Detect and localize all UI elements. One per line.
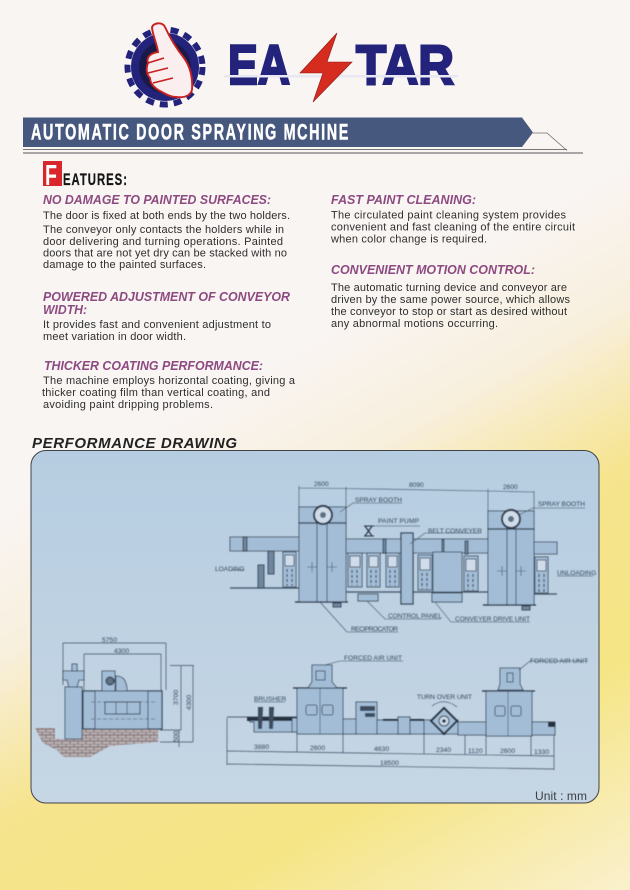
title banner xyxy=(23,118,583,153)
diagram: top plan view: CONTROL PANEL xyxy=(388,613,442,620)
diagram: side view: 3700 xyxy=(173,690,180,705)
diagram: top plan view: BELT CONVEYER xyxy=(428,528,482,535)
text block: convenient motion control xyxy=(331,263,570,330)
diagram: top plan view: UNLOADING xyxy=(557,570,596,577)
unit note: Unit : mm xyxy=(535,789,587,803)
diagram: top plan view: SPRAY BOOTH xyxy=(538,501,585,508)
text block: convenient motion control: driven by the same power source, which allows xyxy=(331,294,570,306)
diagram: side view: 4300 xyxy=(114,648,129,655)
text block: thicker coating: The machine employs horizontal coating, giving a xyxy=(43,375,296,387)
heading: features xyxy=(43,160,128,192)
logo: Eastar xyxy=(128,23,458,104)
diagram: front elevation: 2600 xyxy=(500,748,515,755)
diagram: front elevation: 2340 xyxy=(436,747,451,754)
text block: powered adjustment: meet variation in door width. xyxy=(43,331,186,343)
diagram: front elevation: FORCED AIR UNIT xyxy=(344,655,402,662)
text block: no damage: damage to the painted surfaces. xyxy=(43,259,206,271)
diagram: top plan view: RECIPROCATOR xyxy=(351,626,398,633)
diagram: front elevation: 1330 xyxy=(534,749,549,756)
text block: powered adjustment: POWERED ADJUSTMENT OF CONVEYOR xyxy=(43,290,290,304)
text block: convenient motion control: CONVENIENT MOTION CONTROL: xyxy=(331,263,535,277)
title text: AUTOMATIC DOOR SPRAYING MCHINE xyxy=(31,120,350,144)
heading: features: F xyxy=(45,160,57,192)
diagram: front elevation: 4630 xyxy=(374,746,389,753)
text block: fast paint cleaning: convenient and fast cleaning of the entire circuit xyxy=(331,222,575,234)
diagram: front elevation: BRUSHER xyxy=(254,696,286,703)
diagram: front elevation xyxy=(227,655,588,770)
text block: thicker coating: avoiding paint dripping problems. xyxy=(43,399,213,411)
diagram: top plan view: 2600 xyxy=(314,481,329,488)
text block: convenient motion control: The automatic turning device and conveyor are xyxy=(331,282,567,294)
diagram: top plan view: 8090 xyxy=(409,482,424,489)
text block: powered adjustment xyxy=(43,290,290,343)
text block: thicker coating: thicker coating film than vertical coating, and xyxy=(42,387,270,399)
text block: convenient motion control: the conveyor to stop or start as desired without xyxy=(331,306,567,318)
text block: no damage: door delivering and turning operations. Painted xyxy=(43,236,283,248)
text block: powered adjustment: WIDTH: xyxy=(43,303,87,317)
wordmark: EASTAR xyxy=(224,33,458,102)
text block: no damage xyxy=(43,193,290,271)
text block: no damage: The door is fixed at both ends by the two holders. xyxy=(43,210,290,222)
diagram: top plan view: LOADING xyxy=(215,566,245,573)
panel: performance drawing xyxy=(31,450,599,803)
text block: fast paint cleaning: when color change is required. xyxy=(330,234,487,246)
text block: thicker coating: THICKER COATING PERFORMANCE: xyxy=(44,359,263,373)
text block: fast paint cleaning xyxy=(330,193,575,246)
text block: powered adjustment: It provides fast and convenient adjustment to xyxy=(43,319,271,331)
diagram: side view: 500 xyxy=(173,730,180,742)
icon: gear with thumbs up xyxy=(128,23,202,104)
diagram: front elevation: FORCED AIR UNIT xyxy=(530,658,588,665)
diagram: top plan view: CONVEYER DRIVE UNIT xyxy=(455,616,530,623)
text block: fast paint cleaning: FAST PAINT CLEANING: xyxy=(331,193,476,207)
diagram: top plan view xyxy=(215,481,596,633)
diagram: front elevation: 3880 xyxy=(254,744,269,751)
diagram: top plan view: PAINT PUMP xyxy=(378,518,420,525)
diagram: side view xyxy=(35,637,194,757)
diagram: top plan view: 2600 xyxy=(503,484,518,491)
diagram: front elevation: TURN OVER UNIT xyxy=(417,694,472,701)
heading: features: EATURES: xyxy=(63,170,128,189)
text block: no damage: NO DAMAGE TO PAINTED SURFACES: xyxy=(43,193,271,207)
icon: lightning bolt xyxy=(300,33,352,102)
diagram: front elevation: 18500 xyxy=(380,760,399,767)
text block: convenient motion control: any abnormal motions occurring. xyxy=(331,318,498,330)
text block: thicker coating xyxy=(42,359,296,411)
text block: no damage: The conveyor only contacts the holders while in xyxy=(43,224,284,236)
diagram: front elevation: 1120 xyxy=(468,748,483,755)
text block: fast paint cleaning: The circulated paint cleaning system provides xyxy=(331,210,566,222)
diagram: side view: 5750 xyxy=(102,637,117,644)
diagram: side view: 4300 xyxy=(186,695,193,710)
diagram: front elevation: 2600 xyxy=(310,745,325,752)
heading: performance drawing: PERFORMANCE DRAWING xyxy=(32,435,237,452)
wordmark: EASTAR: TAR xyxy=(356,33,454,96)
diagram: top plan view: SPRAY BOOTH xyxy=(355,497,402,504)
wordmark: EASTAR: EA xyxy=(228,33,290,96)
text block: no damage: doors that are not yet dry can be stacked with no xyxy=(43,248,287,260)
